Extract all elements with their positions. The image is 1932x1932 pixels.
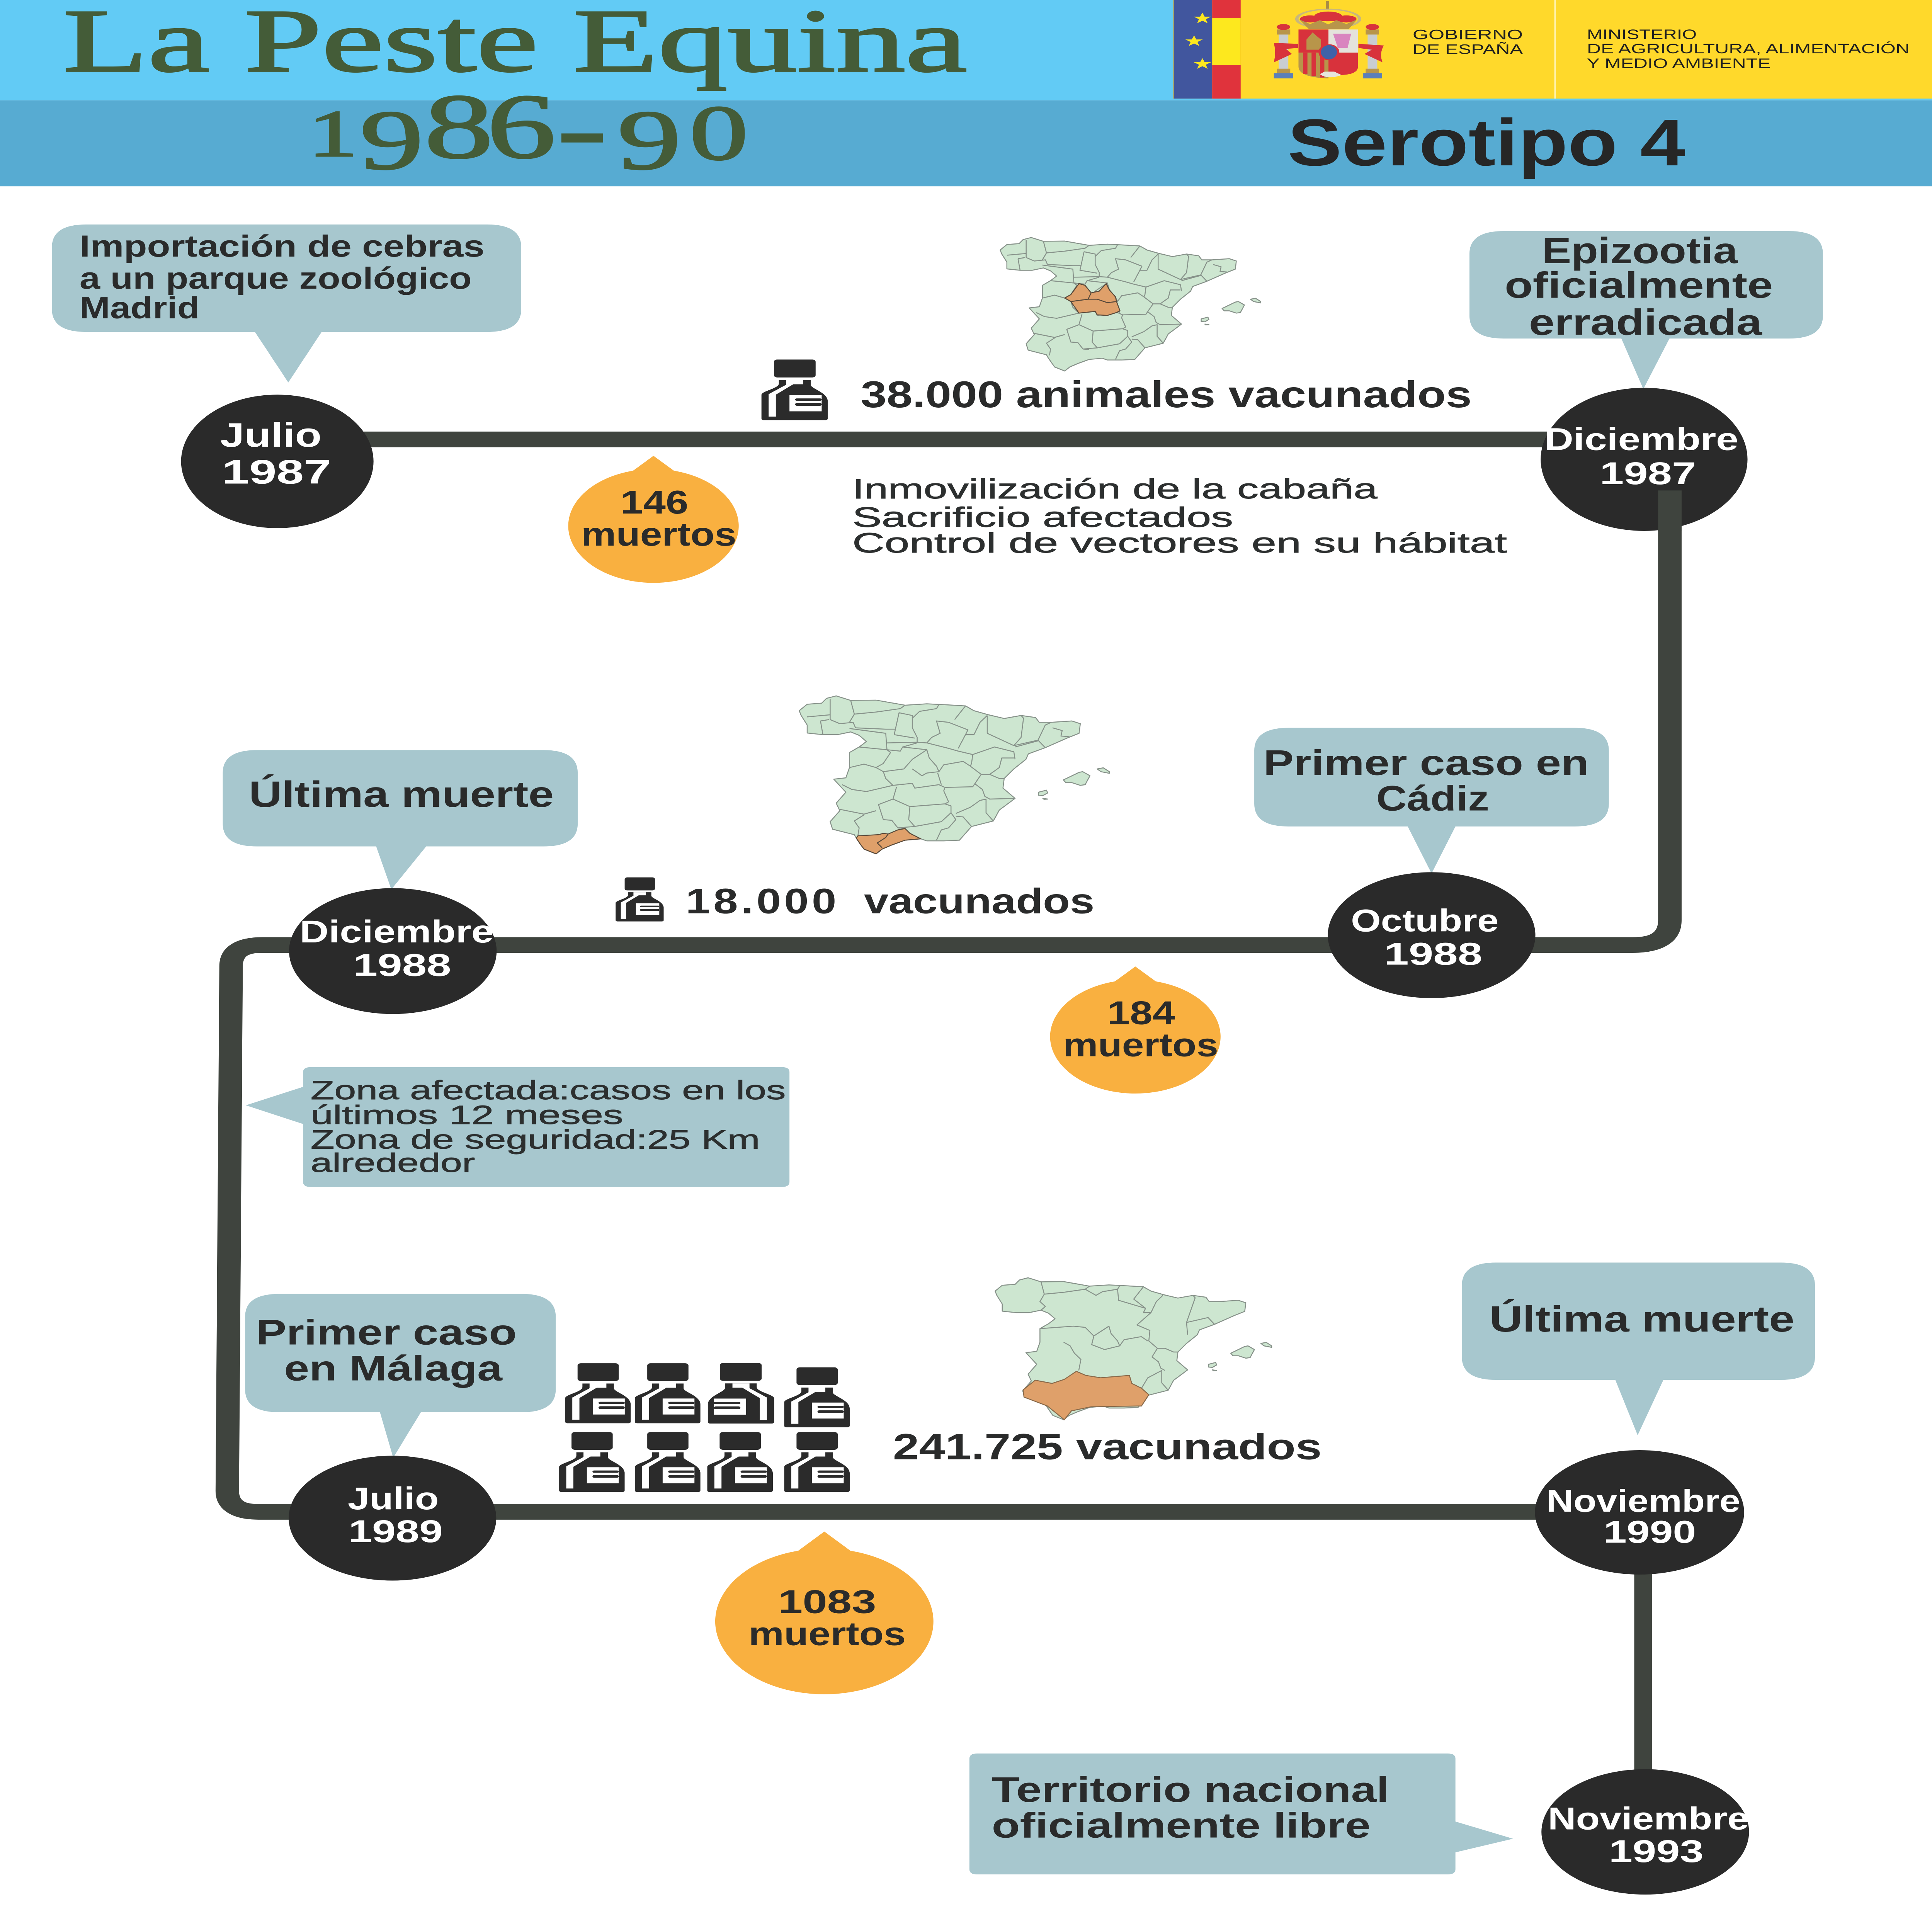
vaccinated count 1988: 18.000 vacunados [686,881,1094,921]
callout: epizootia erradicada: erradicada [1529,302,1762,343]
circle: Julio 1989: Julio [348,1481,439,1516]
circle: Diciembre 1988 [289,888,497,1014]
circle: Julio 1987: 1987 [222,453,331,491]
deaths badge: 146 [568,456,739,583]
years subtitle: 9 [617,93,681,187]
years subtitle: - [557,72,607,184]
circle: Diciembre 1988: 1988 [353,948,451,983]
vaccinated count 1987: 38.000 animales vacunados [861,374,1472,415]
callout: territorio libre: Territorio nacional [992,1770,1389,1810]
callout: última muerte 1988: Última muerte [249,774,554,815]
map: Spain, Andalucía highlighted [995,1278,1272,1420]
circle: Noviembre 1990 [1535,1450,1744,1575]
callout: epizootia erradicada: Epizootia [1542,230,1738,271]
callout: última muerte 1990 [1462,1262,1815,1435]
callout: territorio libre: oficialmente libre [992,1805,1371,1845]
callout: zona afectada [246,1067,789,1187]
logo text: ministerio: MINISTERIO [1587,27,1697,42]
measures text: Control de vectores en su hábitat [852,528,1507,559]
callout: importación: a un parque zoológico [80,262,472,295]
icon: coat of arms [1274,1,1384,78]
callout: zona afectada: Zona afectada:casos en los [311,1075,786,1105]
callout: última muerte 1990: Última muerte [1490,1299,1794,1339]
callout: importación: Madrid [80,291,200,325]
timeline path [227,439,1670,1775]
logo text: gobierno: GOBIERNO [1413,27,1523,42]
circle: Diciembre 1987: 1987 [1600,456,1696,491]
circle: Noviembre 1990: Noviembre [1546,1484,1740,1519]
deaths badge: 1083: muertos [748,1615,906,1652]
measures text [852,474,1507,559]
circle: Noviembre 1993: 1993 [1609,1834,1704,1869]
timeline segment over circle [1658,490,1682,531]
callout: primer caso en Málaga: en Málaga [284,1348,503,1388]
circle: Octubre 1988 [1328,872,1536,998]
circle: Noviembre 1993 [1541,1769,1749,1895]
deaths badge: 146: muertos [581,516,736,553]
deaths badge: 1083 [715,1532,934,1694]
icon: vaccine bottle [762,359,828,420]
years subtitle: 0 [689,90,748,176]
circle: Julio 1987: Julio [220,416,321,454]
circle: Diciembre 1987: Diciembre [1544,422,1738,457]
deaths badge: 184: muertos [1063,1027,1218,1063]
deaths badge: 146: 146 [621,484,688,520]
icon: vaccine bottle small [616,878,664,922]
callout: importación [52,224,521,383]
circle: Octubre 1988: Octubre [1351,903,1498,938]
government logo [1173,0,1932,99]
callout: primer caso en Cádiz: Primer caso en [1264,743,1589,782]
deaths badge: 1083: 1083 [778,1583,876,1620]
callout: epizootia erradicada: oficialmente [1505,265,1773,306]
circle: Julio 1989 [289,1456,496,1581]
circle: Julio 1989: 1989 [349,1514,443,1549]
years subtitle: 6 [487,75,556,177]
serotype heading: Serotipo 4 [1287,105,1685,180]
years subtitle: 1 [308,97,358,170]
map: Spain, Cádiz and Málaga highlighted [799,696,1109,854]
circle: Octubre 1988: 1988 [1384,937,1482,972]
measures text: Inmovilización de la cabaña [852,474,1378,505]
circle: Diciembre 1987 [1541,388,1748,531]
deaths badge: 184: 184 [1107,995,1175,1031]
government logo: Y MEDIO AMBIENTE [1587,56,1770,71]
callout: primer caso en Cádiz [1254,728,1609,874]
callout: epizootia erradicada [1469,230,1823,389]
government logo: DE ESPAÑA [1413,41,1523,57]
callout: importación: Importación de cebras [80,229,485,263]
callout: zona afectada: alrededor [311,1148,475,1178]
callout: primer caso en Málaga: Primer caso [256,1312,517,1352]
callout: zona afectada: últimos 12 meses [311,1100,623,1130]
callout: zona afectada: Zona de seguridad:25 Km [311,1124,760,1154]
map: Spain, central provinces highlighted [1000,238,1261,371]
deaths badge: 184 [1050,966,1221,1094]
measures text: Sacrificio afectados [852,502,1233,533]
callout: territorio libre [969,1753,1513,1874]
circle: Noviembre 1990: 1990 [1604,1514,1696,1549]
vaccinated count 1989: 241.725 vacunados [893,1426,1322,1467]
callout: primer caso en Málaga [245,1294,556,1458]
callout: última muerte 1988 [223,750,578,889]
circle: Julio 1987 [181,395,374,528]
years subtitle: 9 [360,93,423,187]
years subtitle: 8 [424,75,493,177]
government logo: DE AGRICULTURA, ALIMENTACIÓN [1587,41,1910,56]
circle: Noviembre 1993: Noviembre [1548,1801,1749,1836]
callout: primer caso en Cádiz: Cádiz [1376,778,1489,818]
circle: Diciembre 1988: Diciembre [299,914,493,949]
header band [0,0,1932,187]
icon group: vaccine bottles [559,1363,850,1492]
